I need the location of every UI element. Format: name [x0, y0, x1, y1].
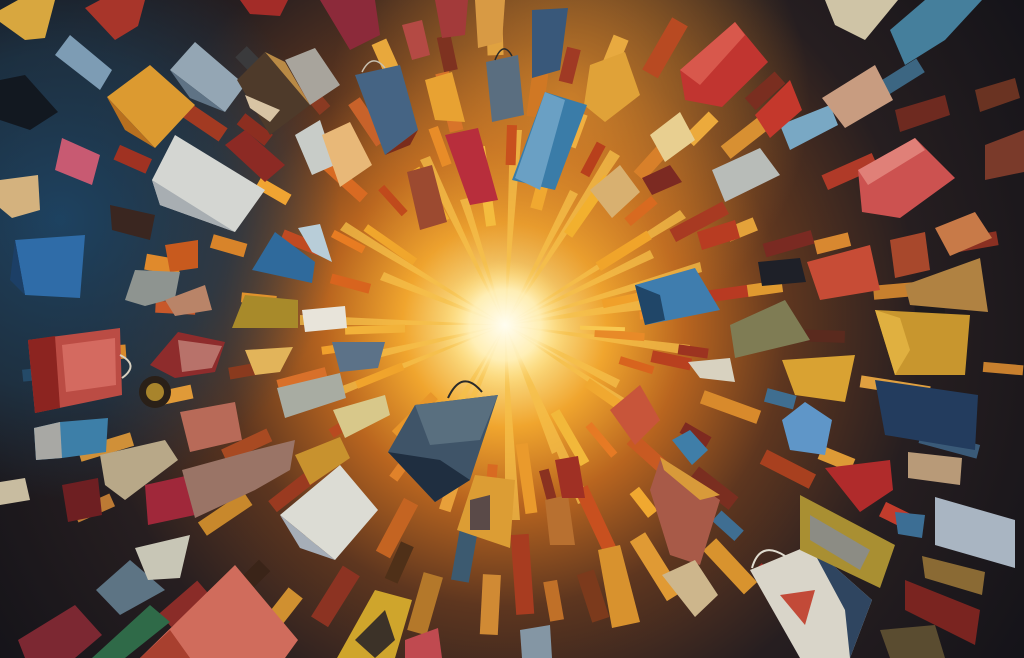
bag: grey-blue: [170, 42, 245, 112]
bag: blue small: [672, 430, 708, 465]
bag: cream small: [0, 478, 30, 505]
bag: dark brown small: [110, 205, 155, 240]
bag: navy large: [875, 380, 978, 450]
bag: brown red: [650, 457, 720, 565]
bag: white blue: [935, 497, 1015, 568]
bag: dark red small: [825, 460, 893, 512]
bright core of the burst: [440, 260, 570, 390]
bag: top small red: [402, 20, 430, 60]
bag: blue: [635, 268, 720, 325]
bag: red: [555, 456, 585, 498]
light rays from centre: [300, 130, 702, 520]
bag: white large: [152, 135, 265, 232]
bags: centre and bottom: [337, 381, 980, 658]
bag: grey white: [277, 373, 346, 418]
bag: blue: [252, 232, 315, 283]
bag: orange red small: [935, 212, 992, 256]
bag: brown right top: [975, 78, 1020, 112]
bag: red right: [890, 232, 930, 278]
bag: brown: [237, 52, 310, 135]
bag: red center top: [445, 128, 498, 205]
bag: yellow large: [875, 310, 970, 375]
bag: navy: [355, 61, 418, 155]
bag: cream: [0, 175, 40, 218]
bag: cream: [662, 560, 718, 617]
bag: orange: [165, 240, 198, 272]
bags: left side: [0, 75, 390, 658]
bag: dark red: [225, 130, 285, 182]
bag: pale: [295, 120, 335, 175]
bag: red: [755, 80, 802, 138]
bag: blue with grey: [34, 418, 108, 460]
bag: red small right of centre: [697, 220, 740, 250]
bag: grey bottom: [520, 625, 552, 658]
bag: blue tall: [782, 402, 832, 455]
bag: white small: [135, 535, 190, 580]
bag: blue grey: [486, 49, 524, 122]
bag: tan: [905, 258, 988, 312]
bag: white small: [302, 306, 347, 332]
bag: basket lattice: [407, 165, 447, 230]
bag: orange tall: [598, 545, 640, 628]
bag: tan pink: [165, 285, 212, 316]
bag: blue grey: [332, 342, 385, 372]
bag: cream orange: [322, 122, 372, 187]
bag: cream center: [650, 112, 695, 162]
bag: red textured large: [28, 328, 131, 413]
bag: blue: [10, 235, 85, 298]
bag: grey pink long: [182, 440, 295, 518]
bag: dark small: [758, 258, 806, 286]
bag: red top small: [435, 0, 468, 38]
bag: framed box far right: [985, 130, 1024, 180]
bag: navy dark: [0, 75, 58, 130]
bags: top row: [0, 0, 1020, 250]
bag: blue tiny: [895, 512, 925, 538]
bag: grey-blue small left: [55, 35, 112, 90]
bag: pink: [55, 138, 100, 185]
bag: brown tan: [545, 495, 575, 545]
bag: pale blue: [298, 224, 332, 262]
bag: dark red small: [642, 165, 682, 195]
bag: teal: [890, 0, 982, 65]
bag: navy large centre: [388, 381, 498, 502]
bag: red top-left: [85, 0, 145, 40]
bag: white big: [750, 545, 872, 658]
bag: orange: [425, 72, 465, 122]
bag: olive yellow: [232, 295, 298, 328]
bag: pale blue: [780, 105, 838, 150]
bag: tan cylinder: [908, 452, 962, 485]
bag: pink: [180, 402, 242, 452]
bag: green: [92, 605, 170, 658]
bag: cream: [825, 0, 898, 40]
bag: red orange: [610, 385, 660, 445]
bag: dark red: [150, 332, 225, 378]
bag: red top: [320, 0, 380, 50]
bag: grey blue: [96, 560, 165, 615]
bag: tan bottom: [880, 625, 945, 658]
bag: grey: [285, 48, 340, 105]
bag: yellow: [457, 475, 515, 548]
bag: white: [280, 465, 378, 560]
bag: red large: [680, 22, 768, 107]
bag: yellow cream: [245, 347, 293, 375]
bag: pink red: [858, 138, 955, 218]
bag: round tan object: [139, 376, 171, 408]
bag: pink cream: [822, 65, 893, 128]
bag: red orange: [807, 245, 880, 300]
bag: yellow dark: [337, 590, 412, 658]
bag: pink small: [405, 628, 442, 658]
bag: pink big: [140, 565, 298, 658]
bag: blue top-center large: [512, 92, 587, 190]
bag: pale grey: [712, 148, 780, 202]
bag: tan long: [922, 556, 985, 595]
bag: yellow: [584, 52, 640, 122]
bag: cream top-left corner: [0, 0, 55, 40]
bag: yellow: [782, 355, 855, 402]
bag: tan top: [475, 0, 505, 48]
bag: dark red far right: [895, 95, 950, 132]
bag: white small: [688, 358, 735, 382]
bag: cream dark: [100, 440, 178, 500]
bag: yellow: [295, 437, 350, 485]
bag: maroon: [18, 605, 102, 658]
bag: dark red: [240, 0, 288, 16]
bag: olive: [730, 300, 810, 358]
bags: right side: [635, 130, 1024, 595]
bag: red bag long: [145, 475, 195, 525]
bag: olive yellow: [800, 495, 895, 588]
bag: dark maroon: [62, 478, 102, 522]
bag: cream blue: [333, 395, 390, 438]
bag: cream orange: [590, 165, 640, 218]
bag: red bottom right: [905, 580, 980, 645]
bag: grey: [125, 270, 180, 306]
bag: orange yellow box: [107, 65, 195, 148]
bag: navy tall: [532, 8, 568, 78]
